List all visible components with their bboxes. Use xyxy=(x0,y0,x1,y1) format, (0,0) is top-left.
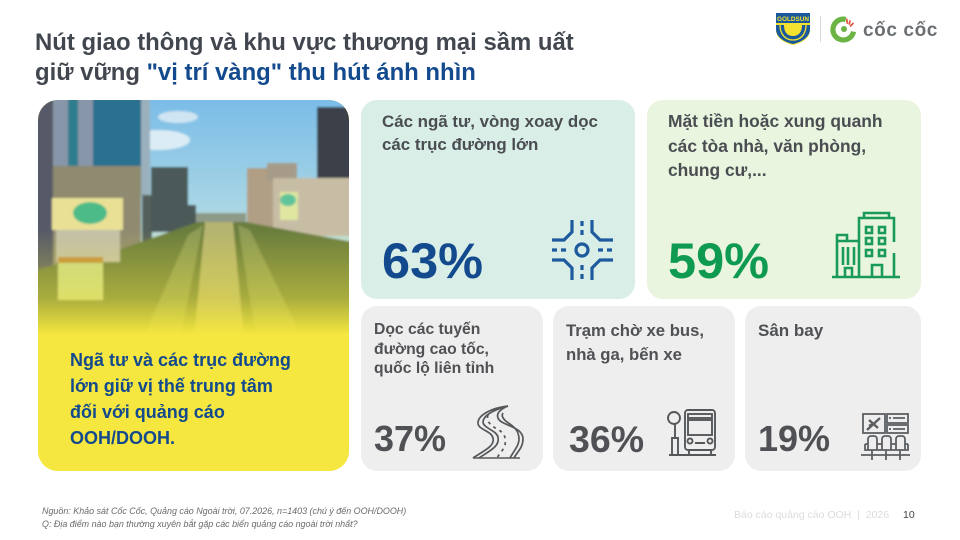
logo: Goldsun xyxy=(776,13,810,45)
icon: buildings xyxy=(832,212,900,278)
title: giữ vững "vị trí vàng" thu hút ánh nhìn xyxy=(35,59,476,86)
icon: bus stop xyxy=(667,409,716,456)
callout text: đối với quảng cáo xyxy=(70,402,225,422)
logo: Cốc Cốc: cốc cốc xyxy=(863,20,938,41)
value: 63% xyxy=(382,232,483,289)
source note xyxy=(42,506,406,529)
label: đường cao tốc, xyxy=(374,340,489,358)
label xyxy=(566,321,704,364)
label xyxy=(374,321,494,377)
label: Dọc các tuyến xyxy=(374,321,480,338)
label: Mặt tiền hoặc xung quanh xyxy=(668,111,882,131)
title: Nút giao thông và khu vực thương mại sầm uất xyxy=(35,29,574,56)
icon: road xyxy=(472,405,524,459)
source note: Nguồn: Khảo sát Cốc Cốc, Quảng cáo Ngoài trời, 07.2026, n=1403 (chú ý đến OOH/DOOH) xyxy=(42,506,406,516)
value: 59% xyxy=(668,232,769,289)
panel: 37% xyxy=(361,306,543,471)
logo: Cốc Cốc xyxy=(820,16,938,43)
label: Các ngã tư, vòng xoay dọc xyxy=(382,112,598,131)
label: nhà ga, bến xe xyxy=(566,344,682,364)
panel: 36% xyxy=(553,306,735,471)
label xyxy=(382,112,598,154)
panel: 59% xyxy=(647,100,921,299)
source note: Q: Địa điểm nào bạn thường xuyên bắt gặp các biển quảng cáo ngoài trời nhất? xyxy=(42,519,358,529)
callout text: lớn giữ vị thế trung tâm xyxy=(70,376,273,396)
value: 36% xyxy=(569,418,644,460)
logo: Goldsun: GOLDSUN xyxy=(777,16,809,23)
callout text: OOH/DOOH. xyxy=(70,428,175,448)
label: các tòa nhà, văn phòng, xyxy=(668,136,866,156)
panel: 19% xyxy=(745,306,921,471)
panel: photo with yellow callout xyxy=(38,100,349,471)
footer: report name and year: Báo cáo quảng cáo OOH | 2026 xyxy=(734,509,889,521)
label: quốc lộ liên tỉnh xyxy=(374,360,494,377)
value: 19% xyxy=(758,418,830,459)
callout text xyxy=(70,350,291,448)
title xyxy=(35,29,574,86)
label xyxy=(668,111,882,180)
icon: roundabout xyxy=(552,220,613,280)
label: Sân bay xyxy=(758,321,823,340)
label: chung cư,... xyxy=(668,160,767,180)
photo: city street with billboards xyxy=(38,100,349,471)
panel: 63% xyxy=(361,100,635,299)
value: 37% xyxy=(374,418,446,459)
label: các trục đường lớn xyxy=(382,134,538,154)
label: Trạm chờ xe bus, xyxy=(566,321,704,340)
page number: 10 xyxy=(903,509,915,521)
icon: airport xyxy=(861,413,910,460)
callout text: Ngã tư và các trục đường xyxy=(70,350,291,370)
